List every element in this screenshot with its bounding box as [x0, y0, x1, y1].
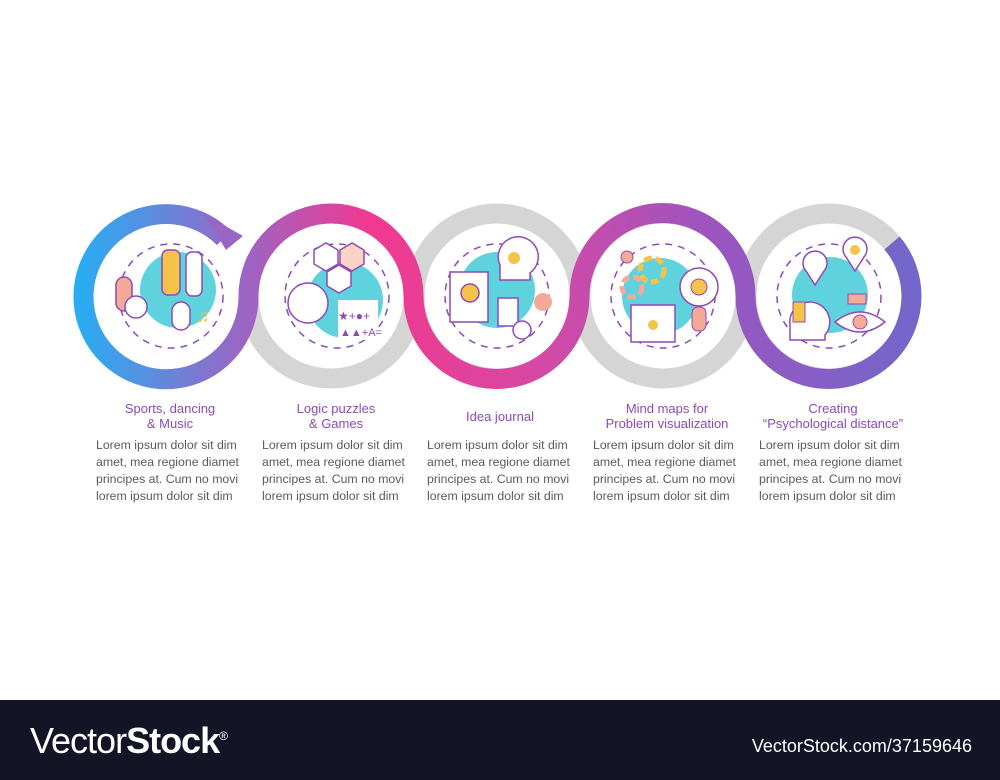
- icon: sports dancing music: [116, 244, 223, 348]
- icon: logic puzzles: ★+●+: [338, 309, 370, 323]
- url: VectorStock.com/37159646: [752, 736, 972, 756]
- text 5: lorem ipsum dolor sit dim: [759, 489, 896, 503]
- inner white circles: [94, 224, 901, 368]
- title 4: Mind maps for: [626, 401, 708, 416]
- text 1: [96, 438, 239, 503]
- text 2: Lorem ipsum dolor sit dim: [262, 438, 403, 452]
- title 3: Idea journal: [466, 409, 534, 424]
- title 2: Logic puzzles: [297, 401, 375, 416]
- icon: sports dancing music: ♫: [196, 306, 210, 326]
- text 3: amet, mea regione diamet: [427, 455, 570, 469]
- text 5: amet, mea regione diamet: [759, 455, 902, 469]
- text 1: amet, mea regione diamet: [96, 455, 239, 469]
- gradient wave path: [84, 213, 912, 379]
- icon: mind maps: [611, 244, 718, 348]
- title 1: Sports, dancing: [125, 401, 215, 416]
- text 2: lorem ipsum dolor sit dim: [262, 489, 399, 503]
- title 1: & Music: [147, 416, 193, 431]
- text 4: lorem ipsum dolor sit dim: [593, 489, 730, 503]
- title 2: [297, 401, 375, 431]
- text 4: [593, 438, 736, 503]
- icon: logic puzzles: ▲▲+A=: [340, 327, 382, 339]
- text 4: principes at. Cum no movi: [593, 472, 735, 486]
- gray rings: [248, 214, 912, 378]
- text 1: lorem ipsum dolor sit dim: [96, 489, 233, 503]
- title 2: & Games: [309, 416, 363, 431]
- footer bar: [0, 700, 1000, 780]
- text 3: principes at. Cum no movi: [427, 472, 569, 486]
- icon: idea journal: [445, 237, 552, 348]
- title 4: [606, 401, 728, 431]
- text 4: Lorem ipsum dolor sit dim: [593, 438, 734, 452]
- arrow head: [204, 214, 243, 250]
- icon: logic puzzles: [285, 243, 389, 348]
- text 1: principes at. Cum no movi: [96, 472, 238, 486]
- text 4: amet, mea regione diamet: [593, 455, 736, 469]
- logo: VectorStock®: [30, 720, 227, 761]
- text 3: [427, 438, 570, 503]
- text 3: lorem ipsum dolor sit dim: [427, 489, 564, 503]
- title 5: “Psychological distance”: [763, 416, 903, 431]
- title 5: Creating: [808, 401, 858, 416]
- title 4: Problem visualization: [606, 416, 728, 431]
- text 2: principes at. Cum no movi: [262, 472, 404, 486]
- text 5: [759, 438, 902, 503]
- text 1: Lorem ipsum dolor sit dim: [96, 438, 237, 452]
- icon: psychological distance: [777, 237, 885, 348]
- text 5: principes at. Cum no movi: [759, 472, 901, 486]
- title 5: [763, 401, 903, 431]
- text 3: Lorem ipsum dolor sit dim: [427, 438, 568, 452]
- text 2: [262, 438, 405, 503]
- text 5: Lorem ipsum dolor sit dim: [759, 438, 900, 452]
- text 2: amet, mea regione diamet: [262, 455, 405, 469]
- title 1: [125, 401, 215, 431]
